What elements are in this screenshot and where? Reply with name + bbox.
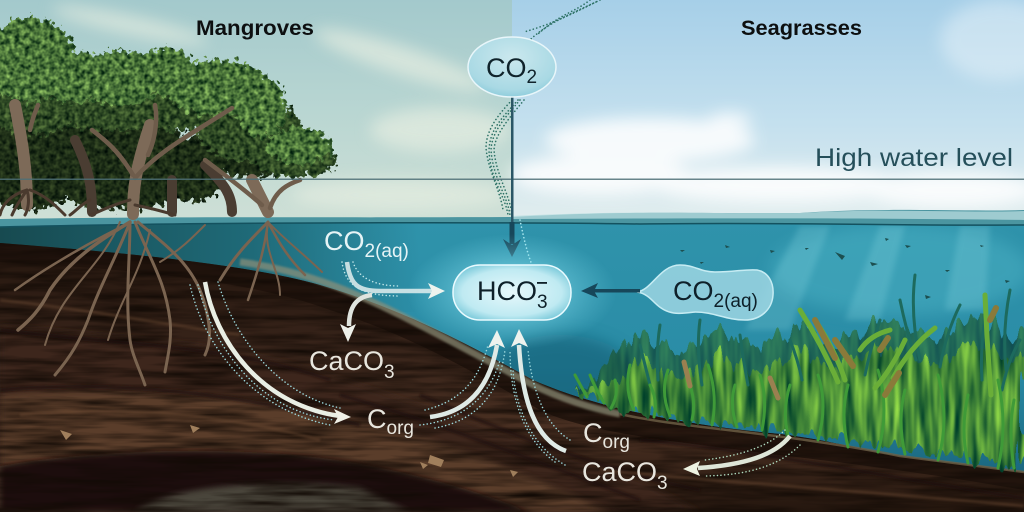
- seagrass meadow: [575, 275, 1024, 468]
- floating particles: [680, 238, 1010, 299]
- high water level line: [0, 178, 1024, 180]
- bubble: CO2 atmosphere: [468, 37, 556, 97]
- mangrove trunks and branches: [15, 105, 300, 214]
- arrow: seagrass roots to CaCO3: [683, 430, 800, 476]
- arrow: root to Corg: [190, 282, 351, 425]
- arrow: Corg to HCO3: [420, 330, 505, 428]
- water surface: [0, 210, 1024, 227]
- particle stream from sky to water: [486, 0, 600, 265]
- arrow: CO2(aq) to CaCO3: [340, 295, 372, 342]
- mangrove main canopy: [0, 18, 337, 177]
- label: CaCO3 seagrass: CaCO: [582, 457, 657, 487]
- arrow: CO2(aq) to HCO3: [342, 262, 445, 299]
- label: Corg seagrass: C: [583, 418, 602, 448]
- heading: Seagrasses: Seagrasses: [741, 17, 862, 40]
- pill: HCO3-: HCO: [477, 276, 537, 306]
- bubble: CO2(aq) seagrass: CO: [673, 276, 714, 306]
- arrow: seagrass sediment to HCO3: [510, 329, 570, 465]
- bubble: CO2 atmosphere: CO: [486, 53, 526, 83]
- label: CO2(aq) mangrove: CO: [324, 226, 364, 256]
- label: Corg mangrove: C: [367, 404, 386, 434]
- label: High water level: High water level: [815, 144, 1013, 172]
- background: right sky: [510, 0, 1024, 225]
- label: Corg mangrove: org: [386, 418, 414, 439]
- bubble: CO2 atmosphere: 2: [526, 67, 537, 88]
- bubble: CO2(aq) seagrass: 2(aq): [714, 291, 758, 312]
- panel: sediment layers: [0, 240, 1024, 512]
- label: CaCO3 mangrove: CaCO: [309, 346, 384, 376]
- background: left sky: [0, 0, 512, 225]
- heading: Mangroves: Mangroves: [196, 17, 314, 40]
- arrow: seagrass CO2(aq) to HCO3: [581, 283, 640, 298]
- label: CO2(aq) mangrove: 2(aq): [364, 241, 409, 262]
- pill: HCO3-: [453, 265, 571, 320]
- water body: [0, 222, 1024, 512]
- mangrove dark interior foliage: [0, 100, 310, 210]
- pill: HCO3-: 3: [537, 292, 548, 313]
- label: CaCO3 mangrove: 3: [384, 362, 395, 383]
- mangrove roots below water: [15, 222, 322, 385]
- bubble: CO2(aq) seagrass: [637, 265, 773, 320]
- mangrove prop roots above water: [0, 190, 175, 215]
- glow behind HCO3: [407, 234, 617, 350]
- label: CaCO3 seagrass: 3: [657, 473, 668, 494]
- label: Corg seagrass: org: [602, 432, 630, 453]
- arrow: CO2 down to HCO3: [503, 96, 521, 257]
